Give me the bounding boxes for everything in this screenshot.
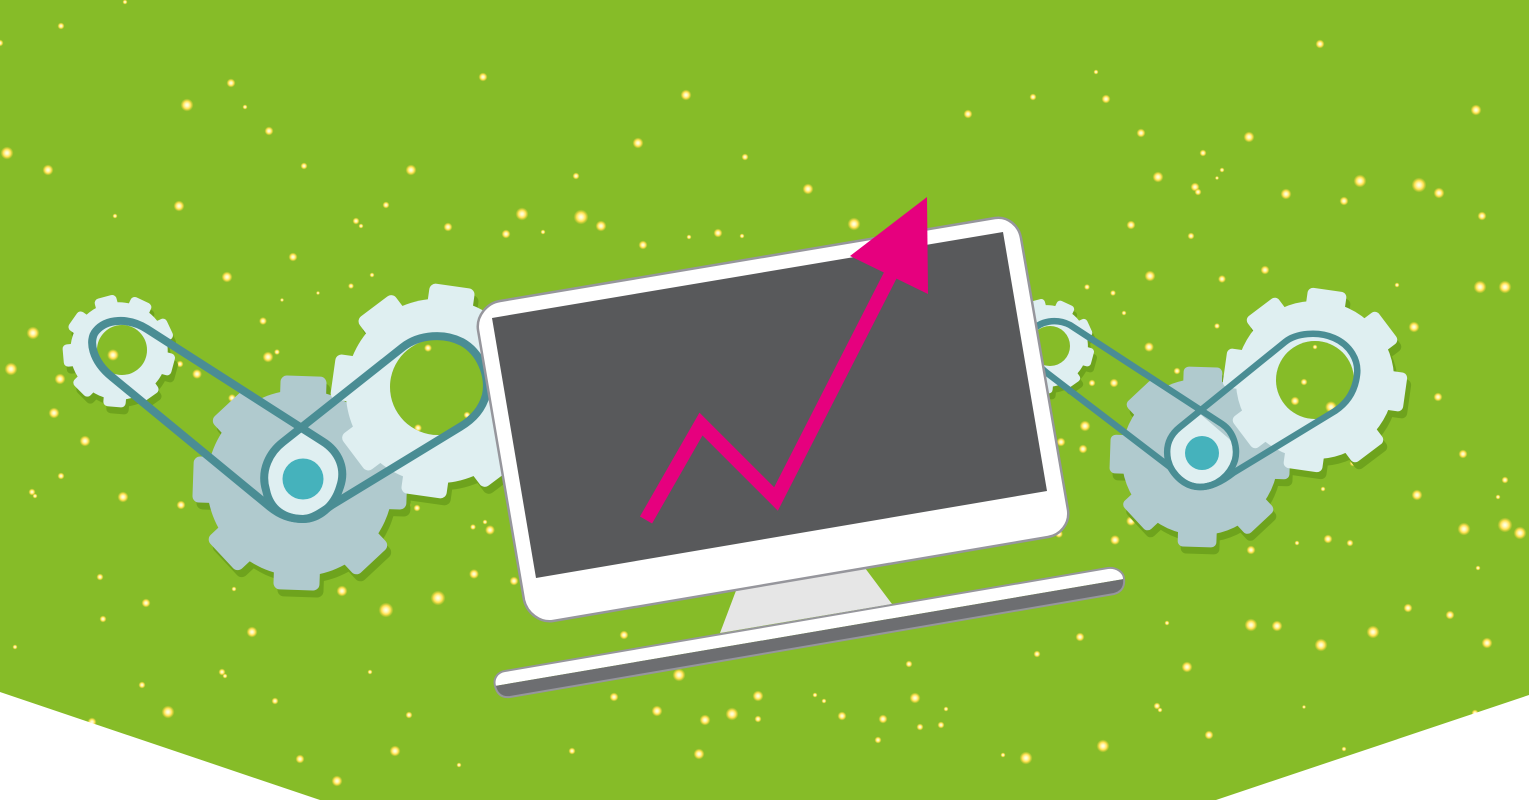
right gear assembly [1033,288,1411,554]
small pale gear: right [1033,299,1094,394]
arrow line [646,270,893,520]
arrow head [850,197,928,294]
centre pulley teardrop: left [264,432,342,519]
base top surface [495,568,1124,686]
small pale gear: left [62,295,175,408]
gear shadows: right [1049,299,1411,554]
monitor stand [720,568,892,633]
monitor base [495,568,1124,697]
base outline [495,568,1124,697]
white corner: bottom left [0,692,320,800]
drive belts: right [1029,321,1357,487]
white corner: bottom right [1216,695,1529,800]
large pale gear: left [330,284,502,498]
monitor screen [492,232,1047,578]
centre pulley hub: right [1185,436,1219,470]
monitor bezel [478,218,1068,621]
gear shadows: left [66,296,503,598]
large centre gear: right [1107,364,1293,550]
left gear assembly [62,284,503,598]
large pale gear: right [1222,288,1408,472]
centre pulley teardrop: right [1167,413,1236,487]
large centre gear: left [189,372,411,594]
drive belts: left [92,321,487,519]
rising pink arrow [646,197,928,520]
base front edge [495,579,1124,697]
centre pulley hub: left [282,458,324,500]
monitor [478,218,1068,621]
